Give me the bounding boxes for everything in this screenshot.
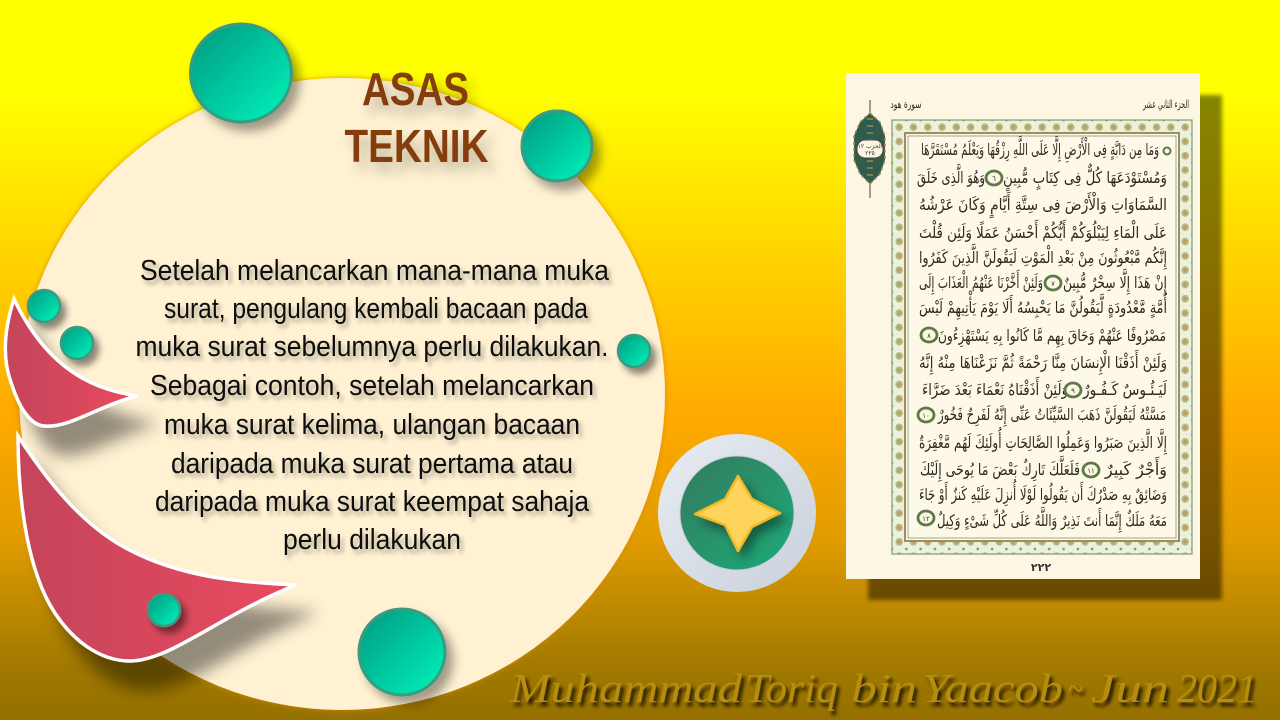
Arabic verse lines: وَأَجْرٌ كَبِيرٌ — [1104, 456, 1167, 481]
badge inner disc — [680, 456, 794, 570]
Quran page shadow — [868, 95, 1222, 600]
Arabic verse lines: أُمَّةٍ مَّعْدُودَةٍ لَّيَقُولُنَّ مَا يَحْبِسُهُ أَلَا يَوْمَ يَأْتِيهِمْ لَيْسَ — [919, 291, 1168, 321]
Arabic verse lines: وَضَائِقٌ بِهِ صَدْرُكَ أَن يَقُولُوا لَوْلَا أُنزِلَ عَلَيْهِ كَنزٌ أَوْ جَاءَ — [919, 479, 1167, 507]
author credit footer: Toriq — [745, 665, 838, 711]
teal decorative circles — [28, 24, 650, 695]
Arabic verse lines: مَعَهُ مَلَكٌ إِنَّمَا أَنتَ نَذِيرٌ وَاللَّهُ عَلَى كُلِّ شَىْءٍ وَكِيلٌ — [937, 505, 1167, 533]
juz medallion: الحزب ١٢ — [858, 143, 883, 150]
red swoosh: lower — [18, 436, 296, 661]
star badge — [658, 434, 816, 592]
verse markers — [918, 148, 1170, 525]
body text: Setelah melancarkan mana-mana muka — [140, 255, 609, 287]
Arabic verse lines — [917, 134, 1168, 533]
verse numbers: ٨ — [927, 332, 931, 340]
author credit footer: Yaacob — [922, 665, 1063, 711]
author credit footer: bin — [851, 665, 917, 711]
page number: ٢٢٢ — [1031, 561, 1051, 574]
circle top right — [522, 111, 592, 181]
Arabic verse lines: إِلَّا الَّذِينَ صَبَرُوا وَعَمِلُوا الصَّالِحَاتِ أُولَئِكَ لَهُم مَّغْفِرَةٌ — [919, 427, 1168, 455]
page header right: الجزء الثاني عشر — [1142, 98, 1189, 111]
main cream circle panel — [19, 78, 665, 710]
body text: daripada muka surat pertama atau — [171, 448, 573, 480]
ornamental border — [892, 120, 1192, 554]
verse numbers — [922, 175, 1095, 523]
Arabic verse lines: عَلَى الْمَاءِ لِيَبْلُوَكُمْ أَيُّكُمْ أَحْسَنُ عَمَلًا وَلَئِن قُلْتَ — [919, 219, 1167, 243]
body text — [136, 255, 609, 556]
Arabic verse lines: وَلَئِنْ أَخَّرْنَا عَنْهُمُ الْعَذَابَ إِلَى — [919, 269, 1043, 295]
small circle right — [618, 335, 650, 367]
author credit footer: 2021 — [1177, 665, 1257, 711]
Arabic verse lines: وَهُوَ الَّذِى خَلَقَ — [917, 162, 985, 188]
verse numbers: ٧ — [1051, 280, 1055, 288]
body text: muka surat sebelumnya perlu dilakukan. — [136, 331, 608, 363]
small circle left 2 — [61, 327, 93, 359]
large circle bottom — [359, 609, 445, 695]
Arabic verse lines: وَمُسْتَوْدَعَهَا كُلٌّ فِى كِتَابٍ مُّبِينٍ — [1003, 163, 1167, 192]
body text: daripada muka surat keempat sahaja — [155, 486, 589, 518]
body text: perlu dilakukan — [283, 524, 461, 556]
page paper — [846, 73, 1200, 579]
page header left: سورة هود — [890, 98, 922, 111]
Arabic verse lines: إِنَّكُم مَّبْعُوثُونَ مِنْ بَعْدِ الْمَوْتِ لَيَقُولَنَّ الَّذِينَ كَفَرُوا — [919, 242, 1168, 270]
juz medallion — [854, 100, 885, 198]
juz medallion: ٢٣٥ — [865, 150, 875, 157]
Arabic verse lines: لَيَـئُـوسٌ كَـفُـورٌ — [1082, 379, 1168, 400]
Arabic verse lines: فَلَعَلَّكَ تَارِكٌ بَعْضَ مَا يُوحَى إِلَيْكَ — [920, 454, 1080, 482]
verse numbers: ٦ — [992, 175, 996, 183]
Arabic verse lines: مَسَّتْهُ لَيَقُولَنَّ ذَهَبَ السَّيِّئَاتُ عَنِّى إِنَّهُ لَفَرِحٌ فَخُورٌ — [937, 404, 1166, 427]
verse numbers: ٩ — [1071, 387, 1075, 395]
red swoosh: upper — [5, 299, 137, 426]
author credit footer: ~ — [1068, 665, 1083, 711]
Arabic verse lines: مَصْرُوفًا عَنْهُمْ وَحَاقَ بِهِم مَّا كَانُوا بِهِ يَسْتَهْزِءُونَ — [938, 326, 1166, 349]
icon: four-point star — [695, 476, 780, 551]
author credit footer: Muhammad — [509, 665, 743, 711]
author credit footer: Jun — [1091, 665, 1169, 711]
Arabic verse lines: وَلَئِنْ أَذَقْنَاهُ نَعْمَاءَ بَعْدَ ضَرَّاءَ — [922, 376, 1068, 400]
Arabic verse lines: وَلَئِنْ أَذَقْنَا الْإِنسَانَ مِنَّا رَحْمَةً ثُمَّ نَزَعْنَاهَا مِنْهُ إِنَّهُ — [919, 349, 1167, 375]
body text: Sebagai contoh, setelah melancarkan — [150, 370, 594, 402]
Quran page image — [846, 73, 1200, 579]
verse numbers: ١٠ — [922, 412, 930, 420]
title: TEKNIK — [344, 120, 488, 172]
verse numbers: ١٢ — [922, 515, 930, 523]
large circle top — [190, 24, 292, 122]
author credit footer — [509, 665, 1257, 711]
title — [344, 63, 488, 172]
badge outer ring — [658, 434, 816, 592]
small circle on swoosh — [148, 594, 180, 626]
body text: muka surat kelima, ulangan bacaan — [164, 409, 580, 441]
body text: surat, pengulang kembali bacaan pada — [164, 293, 588, 325]
Arabic verse lines: إِنْ هَذَا إِلَّا سِحْرٌ مُّبِينٌ — [1063, 267, 1168, 295]
Arabic verse lines: السَّمَاوَاتِ وَالْأَرْضَ فِى سِتَّةِ أَيَّامٍ وَكَانَ عَرْشُهُ — [919, 191, 1167, 219]
small circle left 1 — [28, 290, 60, 322]
verse numbers: ١١ — [1087, 467, 1095, 475]
title: ASAS — [362, 63, 469, 115]
